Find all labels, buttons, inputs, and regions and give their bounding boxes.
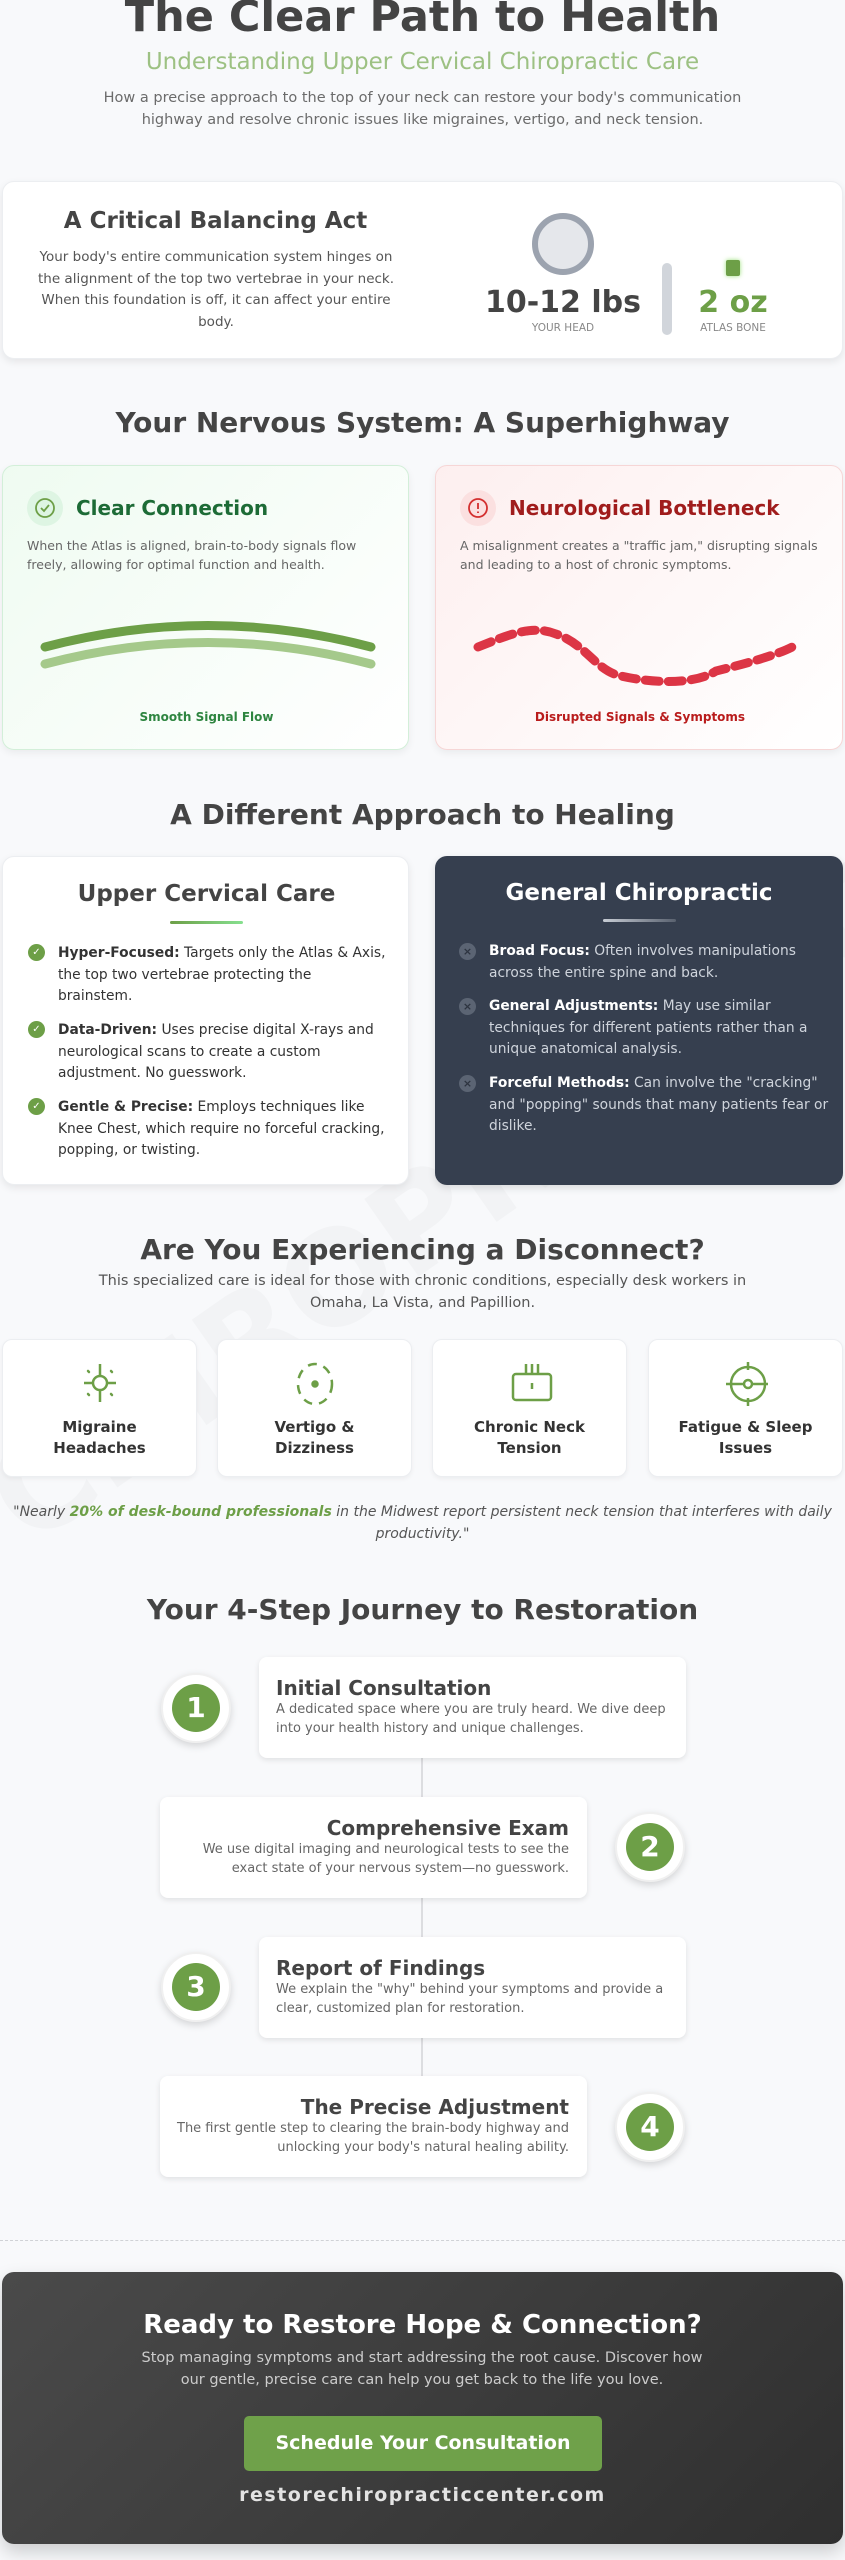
item: data-driven: ✓ — [32, 1024, 41, 1035]
heading: Ready to Restore Hope & Connection? — [143, 2310, 702, 2340]
panel: general chiropractic: Broad Focus: Often involves manipulations across the entire spine and back. — [489, 943, 796, 980]
heading: Neurological Bottleneck — [509, 496, 780, 520]
step 2 — [159, 1797, 688, 1901]
step card: We explain the "why" behind your symptoms and provide a clear, customized plan for restoration. — [276, 1982, 663, 2016]
icon: alert — [460, 490, 496, 526]
underline — [170, 921, 243, 924]
step card: The Precise Adjustment — [301, 2095, 569, 2119]
label: your head: YOUR HEAD — [532, 322, 594, 334]
heading: different approach: A Different Approach to Healing — [170, 798, 675, 831]
symptom card: fatigue: Issues — [719, 1439, 772, 1457]
number badge — [615, 2092, 685, 2162]
symptom card: fatigue: Fatigue & Sleep — [679, 1418, 812, 1436]
panel: neurological bottleneck — [435, 465, 843, 750]
item: gentle: ✓ — [32, 1101, 41, 1112]
step card — [259, 1937, 686, 2038]
item: gentle — [28, 1098, 45, 1115]
connector line — [421, 1700, 423, 2100]
item: forceful methods — [459, 1075, 476, 1092]
panel: upper cervical care — [2, 856, 409, 1185]
symptom card: migraine — [2, 1339, 197, 1477]
panel: general chiropractic: General Adjustments: May use similar techniques for different patients rather than a unique anatomical analysis. — [489, 998, 807, 1057]
item: hyper-focused — [28, 944, 45, 961]
text: A misalignment creates a "traffic jam," disrupting signals and leading to a host of chronic symptoms. — [460, 538, 818, 572]
step card: Comprehensive Exam — [327, 1816, 569, 1840]
intro text: How a precise approach to the top of your neck can restore your body's communication highway and resolve chronic issues like migraines, vertigo, and neck tension. — [104, 90, 741, 128]
number badge: 1 — [186, 1691, 206, 1724]
icon: vertigo — [296, 1362, 334, 1405]
step card — [259, 1657, 686, 1758]
text block: Your body's entire communication system hinges on the alignment of the top two vertebrae in your neck. When this foundation is off, it can affect your entire body. — [38, 249, 394, 330]
panel: general chiropractic — [435, 856, 843, 1185]
panel: general chiropractic: Forceful Methods: Can involve the "cracking" and "popping" sounds that many patients fear or dislike. — [489, 1075, 828, 1134]
step card: Initial Consultation — [276, 1676, 491, 1700]
number badge — [161, 1673, 231, 1743]
item: hyper-focused: ✓ — [32, 947, 41, 958]
heading: A Critical Balancing Act — [64, 208, 367, 234]
item: general adjustments: × — [463, 1000, 472, 1013]
symptom card: vertigo — [217, 1339, 412, 1477]
item: broad focus — [459, 943, 476, 960]
button — [244, 2416, 602, 2471]
callout: quote: "Nearly 20% of desk-bound professionals in the Midwest report persistent neck tension that interferes with daily productivity." — [13, 1504, 832, 1542]
panel: call to action — [2, 2272, 843, 2544]
heading: nervous system: Your Nervous System: A Superhighway — [115, 406, 730, 439]
number badge — [161, 1952, 231, 2022]
text: Stop managing symptoms and start addressing the root cause. Discover how our gentle, precise care can help you get back to the life you love. — [142, 2350, 702, 2388]
subtitle: Understanding Upper Cervical Chiropractic Care — [146, 49, 699, 75]
heading: General Chiropractic — [506, 880, 772, 906]
item: broad focus: × — [463, 945, 472, 958]
button: Schedule Your Consultation — [275, 2432, 571, 2454]
item: forceful methods: × — [463, 1077, 472, 1090]
number badge: 4 — [640, 2110, 660, 2143]
icon: atlas bone — [726, 260, 740, 276]
icon: migraine — [84, 1364, 116, 1402]
underline — [603, 919, 676, 922]
symptom card: vertigo: Dizziness — [275, 1439, 354, 1457]
number badge: 3 — [186, 1970, 206, 2003]
label: atlas bone: ATLAS BONE — [700, 322, 766, 334]
text: ideal for: This specialized care is ideal for those with chronic conditions, especially desk workers in Omaha, La Vista, and Papillion. — [99, 1273, 746, 1310]
item: data-driven — [28, 1021, 45, 1038]
symptom card: migraine: Migraine — [62, 1418, 137, 1436]
step card — [160, 1797, 587, 1898]
panel: upper cervical care: Data-Driven: Uses precise digital X-rays and neurological scans to create a custom adjustment. No guesswork. — [58, 1022, 374, 1081]
icon: fatigue — [726, 1362, 768, 1406]
panel: upper cervical care: Hyper-Focused: Targets only the Atlas & Axis, the top two vertebrae protecting the brainstem. — [58, 945, 386, 1004]
panel: clear connection — [2, 465, 409, 750]
icon: neck tension — [512, 1364, 552, 1402]
step card: Report of Findings — [276, 1956, 485, 1980]
label: Disrupted Signals & Symptoms — [535, 710, 745, 724]
symptom card: vertigo: Vertigo & — [274, 1418, 355, 1436]
icon: check — [27, 490, 63, 526]
chart: smooth signal curves — [40, 621, 376, 668]
symptom card: neck tension — [432, 1339, 627, 1477]
step card: We use digital imaging and neurological tests to see the exact state of your nervous system—no guesswork. — [203, 1842, 569, 1876]
symptom card: neck tension: Tension — [497, 1439, 562, 1457]
stat: head weight: 10-12 lbs — [485, 285, 641, 320]
symptom card: migraine: Headaches — [53, 1439, 146, 1457]
icon: head — [532, 213, 594, 275]
balance bar — [662, 263, 672, 335]
number badge — [615, 1812, 685, 1882]
symptom card: neck tension: Chronic Neck — [474, 1418, 585, 1436]
panel: upper cervical care: Gentle & Precise: Employs techniques like Knee Chest, which require no forceful cracking, popping, or twisting. — [58, 1099, 385, 1158]
number badge: 2 — [640, 1830, 660, 1863]
item: general adjustments — [459, 998, 476, 1015]
heading: disconnect: Are You Experiencing a Disconnect? — [140, 1233, 705, 1266]
step 1 — [158, 1664, 687, 1761]
step card — [160, 2076, 587, 2177]
heading: 4-step journey: Your 4-Step Journey to Restoration — [147, 1593, 698, 1626]
heading: Clear Connection — [76, 496, 268, 520]
url: restorechiropracticcenter.com — [239, 2484, 606, 2506]
chart: disrupted signal wave — [474, 626, 796, 686]
label: Smooth Signal Flow — [139, 710, 274, 724]
step card: A dedicated space where you are truly heard. We dive deep into your health history and unique challenges. — [276, 1702, 666, 1736]
step card: The first gentle step to clearing the brain-body highway and unlocking your body's natural healing ability. — [177, 2121, 569, 2155]
step 3 — [158, 1937, 687, 2041]
text: When the Atlas is aligned, brain-to-body signals flow freely, allowing for optimal function and health. — [27, 538, 356, 572]
panel: critical balancing act — [2, 181, 843, 359]
stat: atlas weight: 2 oz — [698, 285, 768, 320]
heading: Upper Cervical Care — [78, 881, 335, 907]
symptom card: fatigue — [648, 1339, 843, 1477]
step 4 — [159, 2076, 688, 2180]
